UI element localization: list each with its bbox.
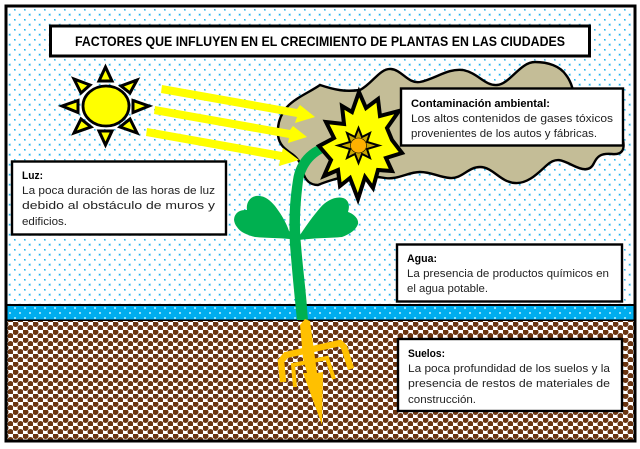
soil band xyxy=(6,321,635,441)
panel: luz: La poca duración de las horas de luz xyxy=(22,185,215,197)
panel: suelos: Suelos: xyxy=(408,348,445,360)
panel: agua: el agua potable. xyxy=(407,283,488,295)
panel: contaminacion ambiental: Contaminación ambiental: xyxy=(411,98,550,110)
panel: suelos: presencia de restos de materiales de xyxy=(408,378,610,390)
sun rays arrows xyxy=(146,85,315,166)
panel: contaminacion ambiental: Los altos contenidos de gases tóxicos xyxy=(411,113,614,125)
panel: agua: La presencia de productos químicos en xyxy=(407,268,609,280)
panel: suelos: construcción. xyxy=(408,394,476,406)
cloud of pollution xyxy=(278,62,624,185)
panel: luz: Luz: xyxy=(22,170,43,182)
panel: suelos xyxy=(398,339,622,411)
panel: contaminacion ambiental: provenientes de los autos y fábricas. xyxy=(411,128,597,140)
leaf: right xyxy=(299,198,358,240)
panel: suelos: La poca profundidad de los suelos y la xyxy=(408,363,611,375)
water band xyxy=(6,305,635,320)
roots xyxy=(281,319,351,425)
panel: luz: edificios. xyxy=(22,216,67,228)
plant xyxy=(234,141,358,425)
icon: flower xyxy=(319,92,402,199)
stem xyxy=(289,141,334,320)
panel: luz xyxy=(12,162,226,234)
title: FACTORES QUE INFLUYEN EN EL CRECIMIENTO DE PLANTAS EN LAS CIUDADES xyxy=(75,34,565,49)
panel: agua: Agua: xyxy=(407,253,437,265)
panel: contaminacion ambiental xyxy=(401,88,623,146)
title xyxy=(50,26,590,56)
icon: sun xyxy=(62,67,149,145)
leaf: left xyxy=(234,196,300,240)
panel: agua xyxy=(397,244,622,302)
panel: luz: debido al obstáculo de muros y xyxy=(22,200,216,212)
